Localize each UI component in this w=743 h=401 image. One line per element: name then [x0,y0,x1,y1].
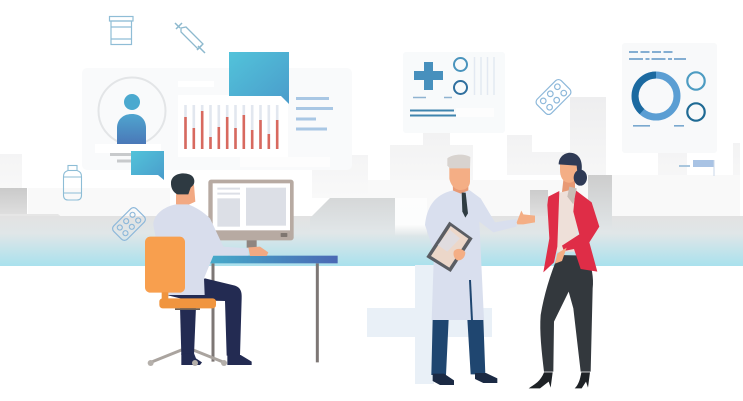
man at desk [145,173,338,366]
chair base [151,308,224,362]
hand [555,248,567,264]
shirt [153,204,248,295]
icon: patient avatar [117,94,146,144]
icon: pill blister right [534,78,573,116]
trousers [431,319,485,375]
icon: jar [110,16,133,44]
mini chart [679,160,714,176]
speech bubble large [229,52,289,104]
shoes [433,373,497,385]
near leg [167,278,242,356]
background medical cross [367,265,492,384]
icon: pill blister left [111,206,147,242]
hand [517,211,535,224]
woman [529,153,599,388]
neck [562,180,575,195]
icon: bottle [64,166,82,200]
desk [202,256,338,263]
panel: medical cross card [403,52,505,133]
text lines under avatar [110,154,131,161]
icon: profile ring [98,78,166,144]
hand on clipboard [453,249,465,260]
icon: plus [414,62,443,90]
monitor [208,180,294,248]
hair bun [574,170,587,186]
bar chart [186,105,277,149]
icon: rings [454,58,467,94]
head [171,173,195,206]
far leg [180,307,196,355]
hand [248,247,268,256]
panel: profile and chart [82,68,352,170]
coat [425,190,517,320]
shoe [227,355,252,365]
skyline background [0,97,743,401]
jacket [543,190,599,272]
doctor [425,155,535,385]
icon: syringe [175,23,205,53]
text lines right [296,98,333,129]
trousers [540,255,593,372]
heels [529,372,590,388]
donut chart [635,75,677,117]
face [560,164,577,183]
chair wheels [148,360,227,366]
speech bubble small [131,151,164,180]
desk legs [213,263,317,362]
coat slit [470,280,472,321]
icon: small rings [687,72,705,121]
white gap beside doctor [395,198,427,236]
blouse [555,188,577,252]
clipboard [426,222,473,272]
neck [453,182,468,200]
tie [462,193,468,218]
chair back [145,237,185,293]
cap [447,155,470,168]
chair seat [159,298,216,308]
face [449,165,470,190]
hair [559,153,582,172]
panel: donut chart card [622,43,717,153]
collar [567,187,577,204]
